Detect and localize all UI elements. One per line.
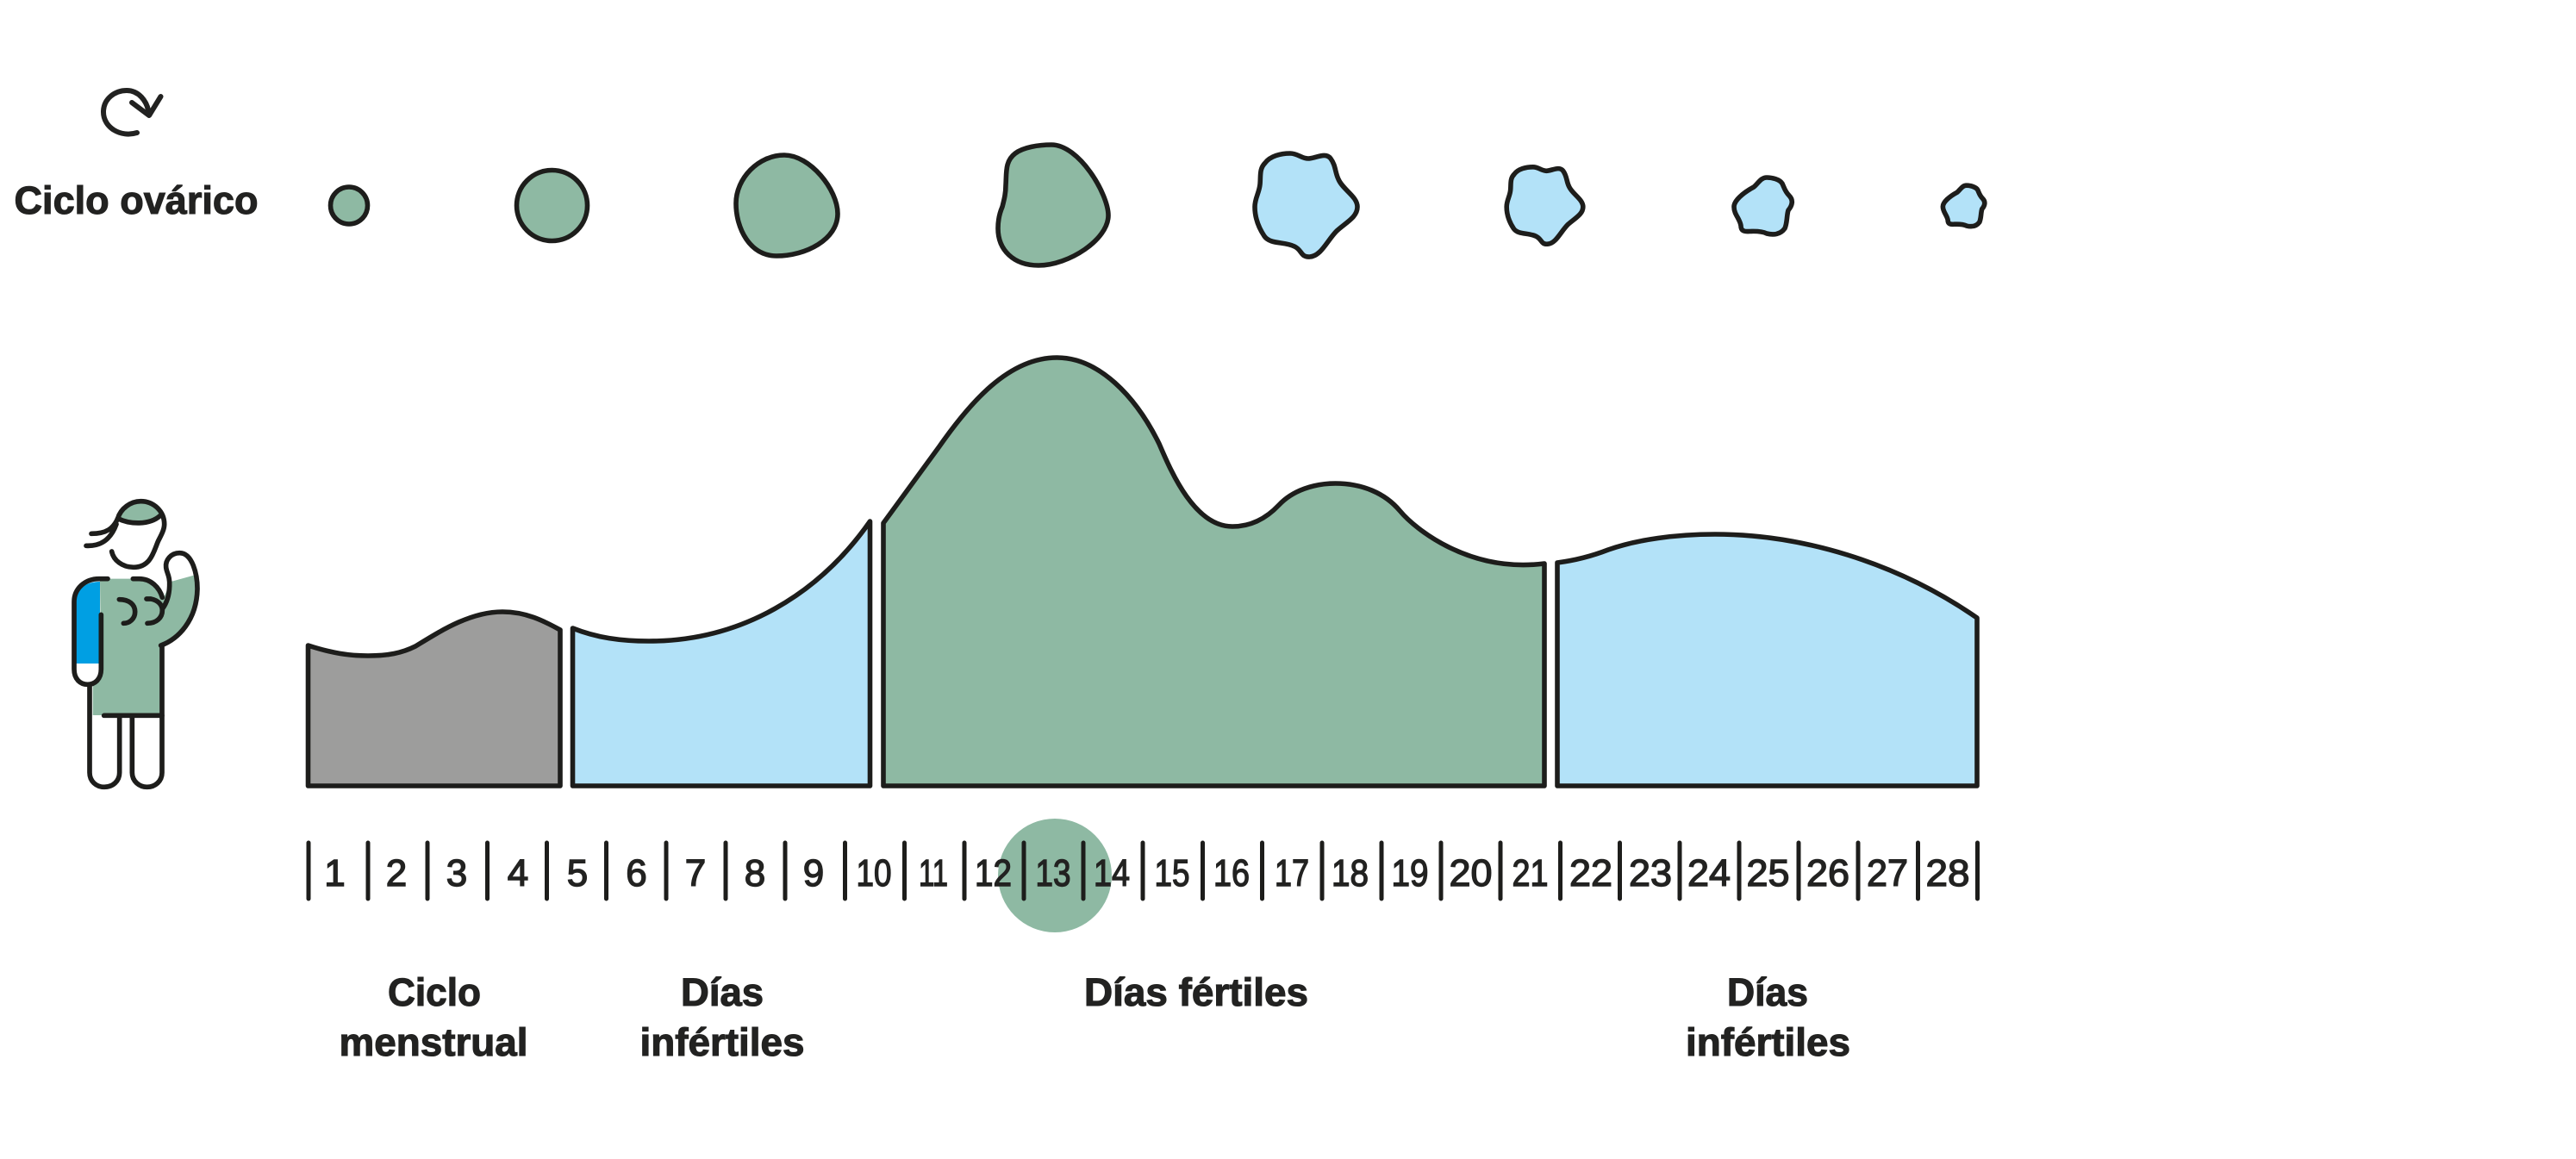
icon: woman figure — [74, 502, 197, 787]
label: Días infértiles second — [1686, 970, 1850, 1064]
day numbers: 13 — [1036, 852, 1070, 894]
label: Días infértiles: Días — [681, 970, 764, 1014]
label: Días infértiles second: infértiles — [1686, 1020, 1850, 1064]
hair strands — [86, 519, 118, 545]
dress hem — [104, 708, 162, 723]
day numbers: 3 — [446, 852, 467, 894]
arm outline — [74, 579, 108, 684]
label: Ciclo menstrual: Ciclo — [388, 970, 481, 1014]
chart: hormone curve by phase — [309, 358, 1977, 786]
day numbers: 20 — [1450, 852, 1493, 894]
heading: Ciclo ovárico: Ciclo ovárico — [14, 178, 259, 222]
ovary stage 4 — [998, 145, 1108, 265]
area: fertile days — [883, 358, 1544, 786]
icon: cycle arrow — [103, 90, 160, 134]
day numbers: 5 — [567, 852, 588, 894]
day numbers: 8 — [745, 852, 765, 894]
day numbers: 10 — [857, 852, 891, 894]
day numbers: 9 — [803, 852, 824, 894]
day numbers: 15 — [1155, 852, 1189, 894]
ovary stage 1 — [331, 187, 367, 224]
day numbers — [324, 852, 1970, 894]
ovary stage 5 — [1255, 153, 1357, 257]
ovary stage 8 — [1943, 185, 1985, 227]
day numbers: 12 — [975, 852, 1012, 894]
label: Días infértiles — [639, 970, 805, 1064]
label: Ciclo menstrual — [340, 970, 527, 1064]
ovarian cycle stages — [331, 145, 1985, 265]
day ruler ticks — [309, 843, 1977, 899]
day numbers: 23 — [1629, 852, 1672, 894]
day numbers: 2 — [386, 852, 407, 894]
day numbers: 1 — [324, 852, 346, 894]
day numbers: 21 — [1512, 852, 1548, 894]
day numbers: 19 — [1391, 852, 1429, 894]
day numbers: 26 — [1806, 852, 1849, 894]
shoulder and chest — [119, 579, 162, 623]
day numbers: 6 — [626, 852, 647, 894]
day numbers: 11 — [919, 852, 948, 894]
day numbers: 17 — [1275, 852, 1309, 894]
day numbers: 7 — [685, 852, 706, 894]
ovary stage 2 — [517, 171, 588, 241]
day numbers: 18 — [1332, 852, 1369, 894]
day numbers: 14 — [1094, 852, 1130, 894]
label: Días fértiles: Días fértiles — [1084, 970, 1308, 1014]
ovary stage 3 — [736, 155, 838, 256]
label: Días infértiles second: Días — [1727, 970, 1808, 1014]
ovary stage 6 — [1506, 167, 1583, 244]
day numbers: 16 — [1213, 852, 1250, 894]
day numbers: 25 — [1746, 852, 1789, 894]
label: Días infértiles: infértiles — [639, 1020, 805, 1064]
area: menstrual phase — [309, 612, 560, 786]
dress fill — [93, 576, 197, 715]
label: Ciclo menstrual: menstrual — [340, 1020, 527, 1064]
day numbers: 24 — [1687, 852, 1731, 894]
sleeve fill — [75, 582, 100, 664]
area: infertile days after ovulation — [1557, 534, 1977, 786]
area: infertile days before ovulation — [572, 521, 870, 786]
ovary stage 7 — [1734, 178, 1792, 234]
day numbers: 27 — [1867, 852, 1908, 894]
ovulation highlight circle — [998, 819, 1112, 932]
day numbers: 4 — [508, 852, 528, 894]
day numbers: 22 — [1569, 852, 1612, 894]
raised arm outline — [161, 553, 197, 645]
head outline — [112, 502, 165, 567]
day numbers: 28 — [1925, 852, 1970, 894]
legs outline — [90, 646, 162, 787]
headband fill — [118, 502, 160, 523]
